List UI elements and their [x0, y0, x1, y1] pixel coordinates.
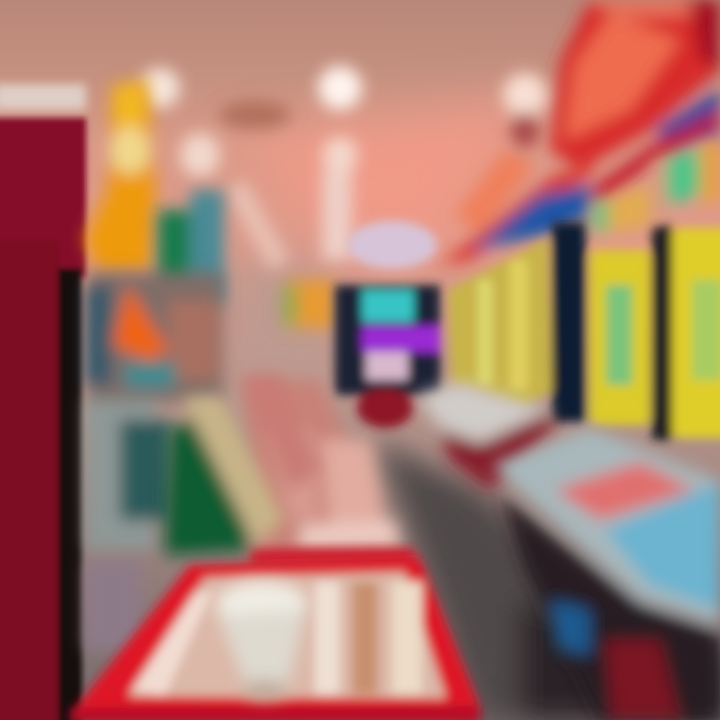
panel: green and teal banner: [158, 190, 224, 305]
ceiling: red and blue bands on the right: [440, 0, 720, 265]
panel: right wall yellow windows: [448, 222, 720, 440]
far end: yellow orange sign: [282, 280, 334, 328]
panel: yellow-orange hanging banner: [84, 80, 155, 272]
panel: foreground red table: [70, 558, 482, 720]
top-left white trim: [0, 84, 86, 110]
ceiling lights: [140, 66, 547, 270]
panel: center tiled aisle: [245, 380, 405, 560]
far end: neon arcade glow: [335, 221, 440, 428]
aisle red band: [250, 548, 415, 566]
icon: white cup on the table: [216, 581, 308, 700]
floor: [375, 440, 720, 720]
panel: right near table: [492, 428, 720, 720]
ceiling glow: [225, 100, 540, 400]
panel: left wall posters: [85, 272, 223, 650]
panel: green booth seat: [165, 375, 320, 555]
panel: left red wall: [0, 118, 86, 720]
panel: right far table: [418, 382, 555, 490]
right wall upper colored panels: [592, 140, 720, 235]
